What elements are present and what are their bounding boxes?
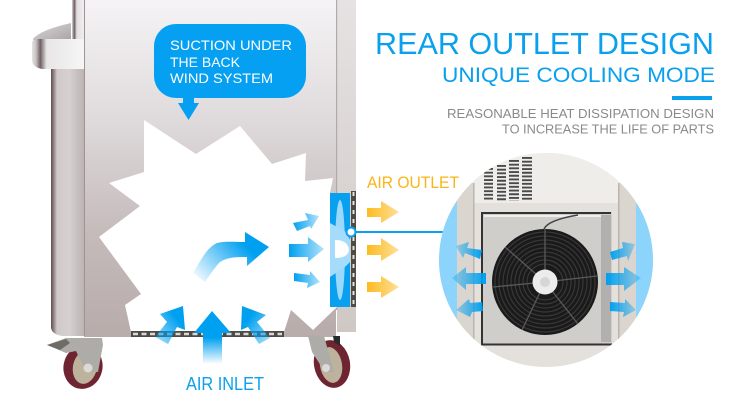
side chain xyxy=(351,191,356,307)
vent slots xyxy=(488,157,527,201)
fan guard xyxy=(492,229,598,335)
subtitle: UNIQUE COOLING MODE xyxy=(442,63,715,87)
starburst cutaway xyxy=(99,120,337,332)
fan blades xyxy=(335,200,345,300)
fan hub xyxy=(532,270,558,294)
icon: outlet arrows xyxy=(367,201,399,298)
callout: suction: SUCTION UNDER xyxy=(170,37,292,53)
description: TO INCREASE THE LIFE OF PARTS xyxy=(502,122,714,136)
callout: suction xyxy=(154,24,306,120)
panel: rear fan detail circle xyxy=(439,150,654,370)
icon: center inlet arrow xyxy=(194,311,231,364)
fan panel xyxy=(330,191,356,307)
label: air outlet: AIR OUTLET xyxy=(367,173,459,192)
callout: suction: WIND SYSTEM xyxy=(170,70,273,86)
connector line xyxy=(346,228,444,236)
title: REAR OUTLET DESIGN xyxy=(375,26,714,61)
icon: right inlet arrow xyxy=(241,306,270,344)
icon: right exhaust arrows xyxy=(606,242,641,317)
bottom intake grille xyxy=(131,331,284,337)
icon: air inlet arrows xyxy=(155,306,270,364)
handle xyxy=(32,23,84,69)
icon: left exhaust arrows xyxy=(452,242,486,317)
label: air inlet: AIR INLET xyxy=(186,374,264,394)
accent bar xyxy=(672,96,712,100)
description: REASONABLE HEAT DISSIPATION DESIGN xyxy=(447,106,714,121)
icon: arrows to the fan xyxy=(289,213,324,288)
mounting plate xyxy=(481,212,612,345)
wheel: right caster xyxy=(308,336,354,391)
callout: suction: THE BACK xyxy=(170,54,241,70)
description xyxy=(447,106,714,136)
wheel: left caster xyxy=(47,338,107,393)
icon: left inlet arrow xyxy=(155,306,185,344)
fan cable xyxy=(544,215,578,229)
machine body xyxy=(32,0,356,337)
icon: curved airflow arrow xyxy=(193,232,269,282)
